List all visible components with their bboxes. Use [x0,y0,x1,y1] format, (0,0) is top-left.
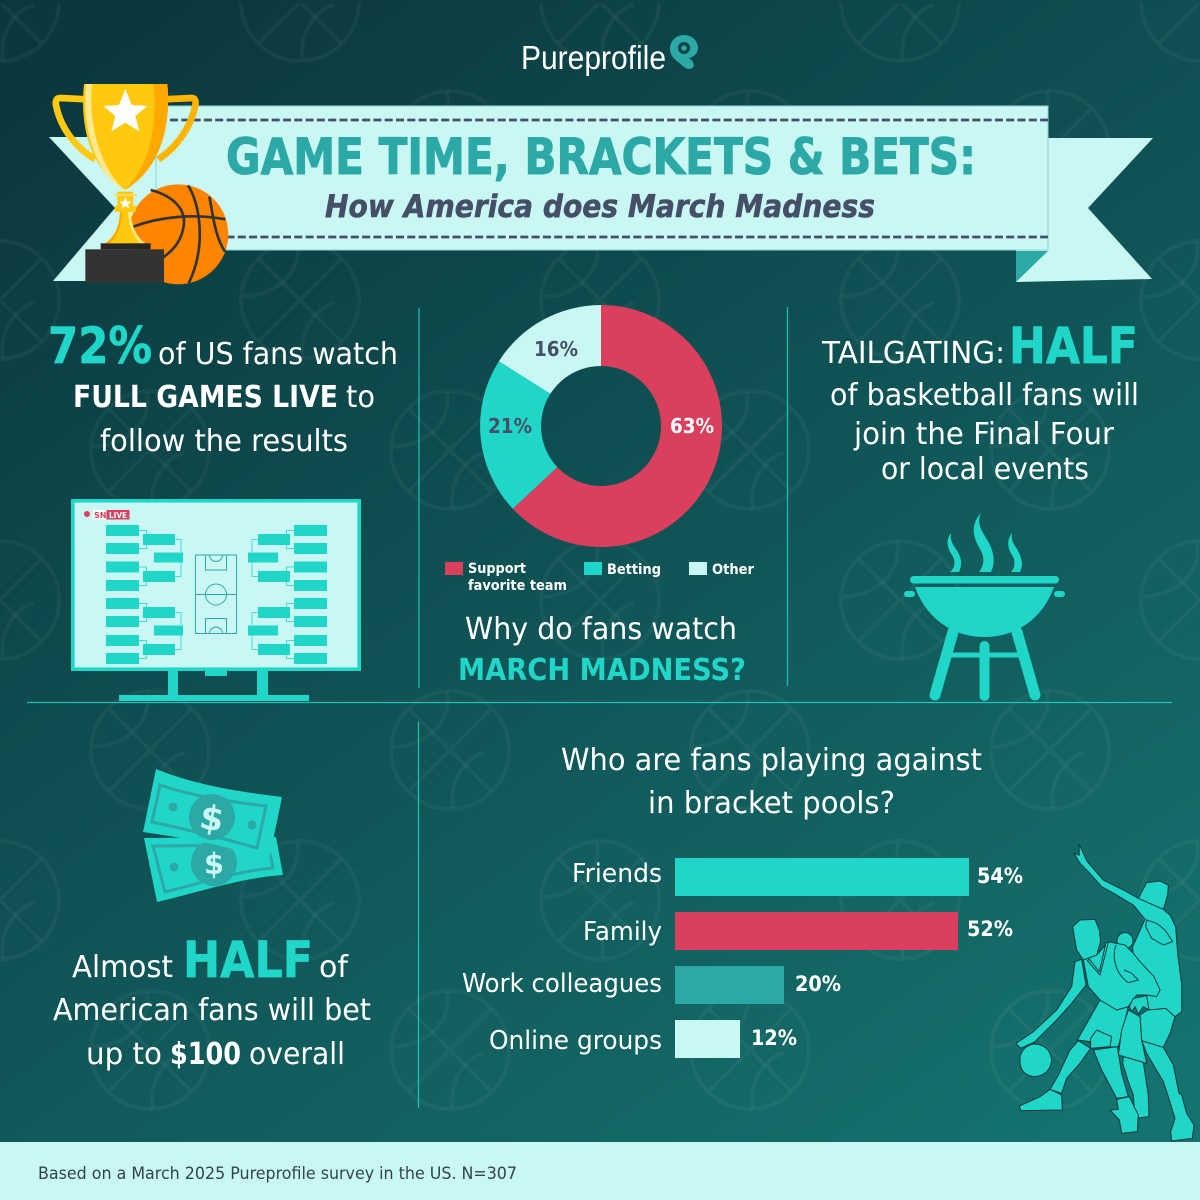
live badge: SN [94,511,106,520]
donut chart: why fans watch [480,305,722,547]
stat: tailgating: HALF [1009,317,1138,375]
bar chart heading [561,743,982,821]
donut legend [445,561,754,594]
court [196,555,236,634]
stat: almost half will bet: $100 [170,1037,241,1072]
live badge: LIVE [109,511,127,520]
icon: grill [904,513,1065,696]
bottom bill: $ [204,847,224,881]
bar: family [583,912,1013,950]
donut legend: Support [468,561,526,577]
stat: tailgating: of basketball fans will [830,378,1139,413]
bar: friends: 54% [977,864,1023,888]
banner ribbon [49,106,1153,282]
bar: work colleagues: Work colleagues [462,969,662,999]
bar: work colleagues: 20% [795,972,841,996]
stat: tailgating: TAILGATING: [821,336,1005,371]
title: GAME TIME, BRACKETS & BETS: [226,128,976,186]
donut legend: Betting [607,562,661,578]
stat: 72% watch full games: of US fans watch [158,337,398,372]
bracket boxes [106,525,327,664]
donut chart: why fans watch: 16% [534,337,578,361]
stat: 72% watch full games: FULL GAMES LIVE [73,380,338,415]
stat: almost half will bet: up to [86,1037,162,1072]
stat: 72% watch full games: follow the results [100,424,348,459]
stat: almost half will bet: of [319,950,349,985]
donut legend: favorite team [468,578,567,594]
stat: tailgating: or local events [881,452,1089,487]
bar: family: 52% [967,917,1013,941]
bar: friends: Friends [572,859,662,889]
donut chart: why fans watch: 21% [488,414,532,438]
stat: almost half will bet: Almost [72,950,173,985]
bar: online groups: 12% [751,1026,797,1050]
donut chart: why fans watch: 63% [670,414,714,438]
top bill: $ [197,797,227,841]
icon: money [143,769,283,902]
stat: 72% watch full games: 72% [48,317,152,375]
chart caption [458,612,746,688]
bar chart heading: Who are fans playing against [561,743,982,778]
stat: almost half will bet: American fans will bet [53,993,371,1028]
footer: Based on a March 2025 Pureprofile survey in the US. N=307 [38,1164,517,1184]
stat: almost half will bet: overall [249,1037,345,1072]
bar: online groups: Online groups [489,1026,662,1056]
donut legend: Other [712,562,754,578]
divider lines [27,307,1172,1108]
icon: TV with bracket [73,501,359,701]
bar: work colleagues [462,966,841,1004]
bar: family: Family [583,917,662,947]
bar chart heading: in bracket pools? [648,786,895,821]
subtitle: How America does March Madness [325,189,875,225]
logo: Pureprofile: Pureprofile [521,39,666,76]
chart caption: MARCH MADNESS? [458,653,746,688]
footer [0,1142,1200,1200]
stat: almost half will bet [53,931,371,1072]
bar: friends [572,858,1023,896]
bar chart: bracket pool opponents [462,858,1023,1058]
live badge [84,510,130,520]
stat: tailgating: join the Final Four [853,417,1115,452]
chart caption: Why do fans watch [465,612,737,647]
stat: almost half will bet: HALF [183,931,313,989]
icon: basketball players [1016,844,1194,1141]
bar: online groups [489,1020,797,1058]
icon: trophy and basketball [56,84,228,284]
stat: tailgating [821,317,1139,487]
stat: 72% watch full games [48,317,398,459]
stat: 72% watch full games: to [346,380,375,415]
